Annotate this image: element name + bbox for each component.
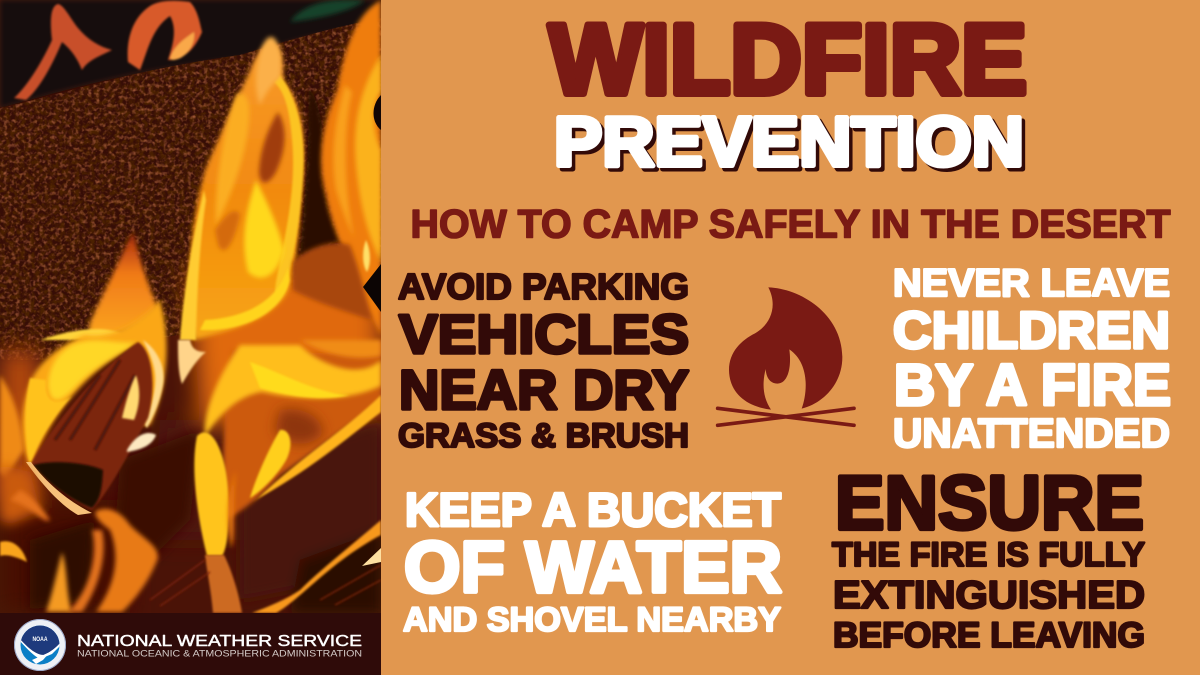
footer bar xyxy=(0,613,381,675)
tip: avoid parking: VEHICLES xyxy=(399,303,689,365)
tip: ensure xyxy=(832,461,1145,655)
tip: never leave children: CHILDREN xyxy=(893,302,1170,360)
bottom edge yellow xyxy=(40,329,130,340)
left orange edge xyxy=(0,375,24,478)
tip: never leave children: BY A FIRE xyxy=(894,353,1171,418)
icon: campfire xyxy=(718,287,854,425)
inner flame tips xyxy=(122,375,139,420)
dark wood patches xyxy=(0,410,381,613)
hollow side shade xyxy=(215,211,240,250)
wood grain streaks xyxy=(55,360,135,450)
black wood notch xyxy=(363,264,381,312)
feather flames xyxy=(178,340,206,384)
tip: avoid parking: AVOID PARKING xyxy=(398,266,689,307)
tip: never leave children xyxy=(893,262,1171,456)
tip: keep a bucket: KEEP A BUCKET xyxy=(405,483,781,536)
wood end grain xyxy=(33,462,103,508)
dark night background xyxy=(0,0,381,108)
right flame dark centre xyxy=(374,95,381,130)
upper log texture xyxy=(0,20,381,360)
title: PREVENTION: PREVENTION xyxy=(558,106,1028,184)
flame base glow on log xyxy=(189,44,304,340)
right flame sheet orange xyxy=(223,340,381,520)
far right log ribbon xyxy=(252,520,381,613)
tip: avoid parking: GRASS & BRUSH xyxy=(398,417,689,455)
tip: keep a bucket: AND SHOVEL NEARBY xyxy=(403,601,781,639)
tip: keep a bucket xyxy=(403,483,782,639)
centre flame pale top xyxy=(256,37,281,105)
title: WILDFIRE: WILDFIRE xyxy=(549,4,1027,114)
orange brown interior shadow xyxy=(275,409,322,444)
flame dark hollow xyxy=(259,112,285,182)
flame yellow core xyxy=(244,180,284,278)
right wispy tip xyxy=(363,240,370,272)
tip: ensure: ENSURE xyxy=(835,461,1144,546)
top yellow band xyxy=(205,340,381,437)
dark channel beside right flame xyxy=(300,85,342,256)
small flames at top xyxy=(14,1,202,100)
title: PREVENTION: PREVENTION xyxy=(554,102,1024,180)
icon: NOAA logo: NOAA xyxy=(32,636,48,643)
main trunk flame xyxy=(194,432,229,556)
centre flame streak xyxy=(216,94,249,225)
tip: ensure: THE FIRE IS FULLY xyxy=(832,536,1145,574)
yellow blob flame xyxy=(250,430,290,498)
left flame wrap behind wood xyxy=(22,300,167,466)
upper log xyxy=(0,18,381,400)
tip: never leave children: NEVER LEAVE xyxy=(893,262,1170,305)
wood block xyxy=(31,342,153,510)
flame yellow ribbon xyxy=(180,190,206,340)
lower embers base xyxy=(0,254,381,510)
lower wood streaks xyxy=(150,560,381,606)
tip: ensure: BEFORE LEAVING xyxy=(833,616,1145,655)
agency subtitle: NATIONAL OCEANIC & ATMOSPHERIC ADMINISTRATION xyxy=(77,648,362,658)
photo: burning logs and flames xyxy=(0,0,381,613)
background panel xyxy=(381,0,1200,675)
right flame xyxy=(321,0,381,340)
white hot flame tip xyxy=(127,433,156,452)
tip: ensure: EXTINGUISHED xyxy=(833,574,1145,617)
agency name: NATIONAL WEATHER SERVICE xyxy=(77,633,362,650)
tip: never leave children: UNATTENDED xyxy=(893,410,1170,456)
tip: avoid parking: NEAR DRY xyxy=(399,358,689,421)
centre flame rim xyxy=(274,75,304,294)
subtitle: HOW TO CAMP SAFELY IN THE DESERT xyxy=(410,202,1170,246)
green glimpse at top xyxy=(290,0,365,22)
ribbon right of wood xyxy=(143,340,164,428)
tip: avoid parking xyxy=(398,266,689,455)
icon: NOAA logo xyxy=(14,619,66,671)
triangle flame left xyxy=(88,232,158,336)
lower centre orange wisp xyxy=(95,509,158,612)
log edge orange xyxy=(293,243,372,320)
tip: keep a bucket: OF WATER xyxy=(404,528,782,608)
lower diagonal ribbon xyxy=(252,395,381,502)
